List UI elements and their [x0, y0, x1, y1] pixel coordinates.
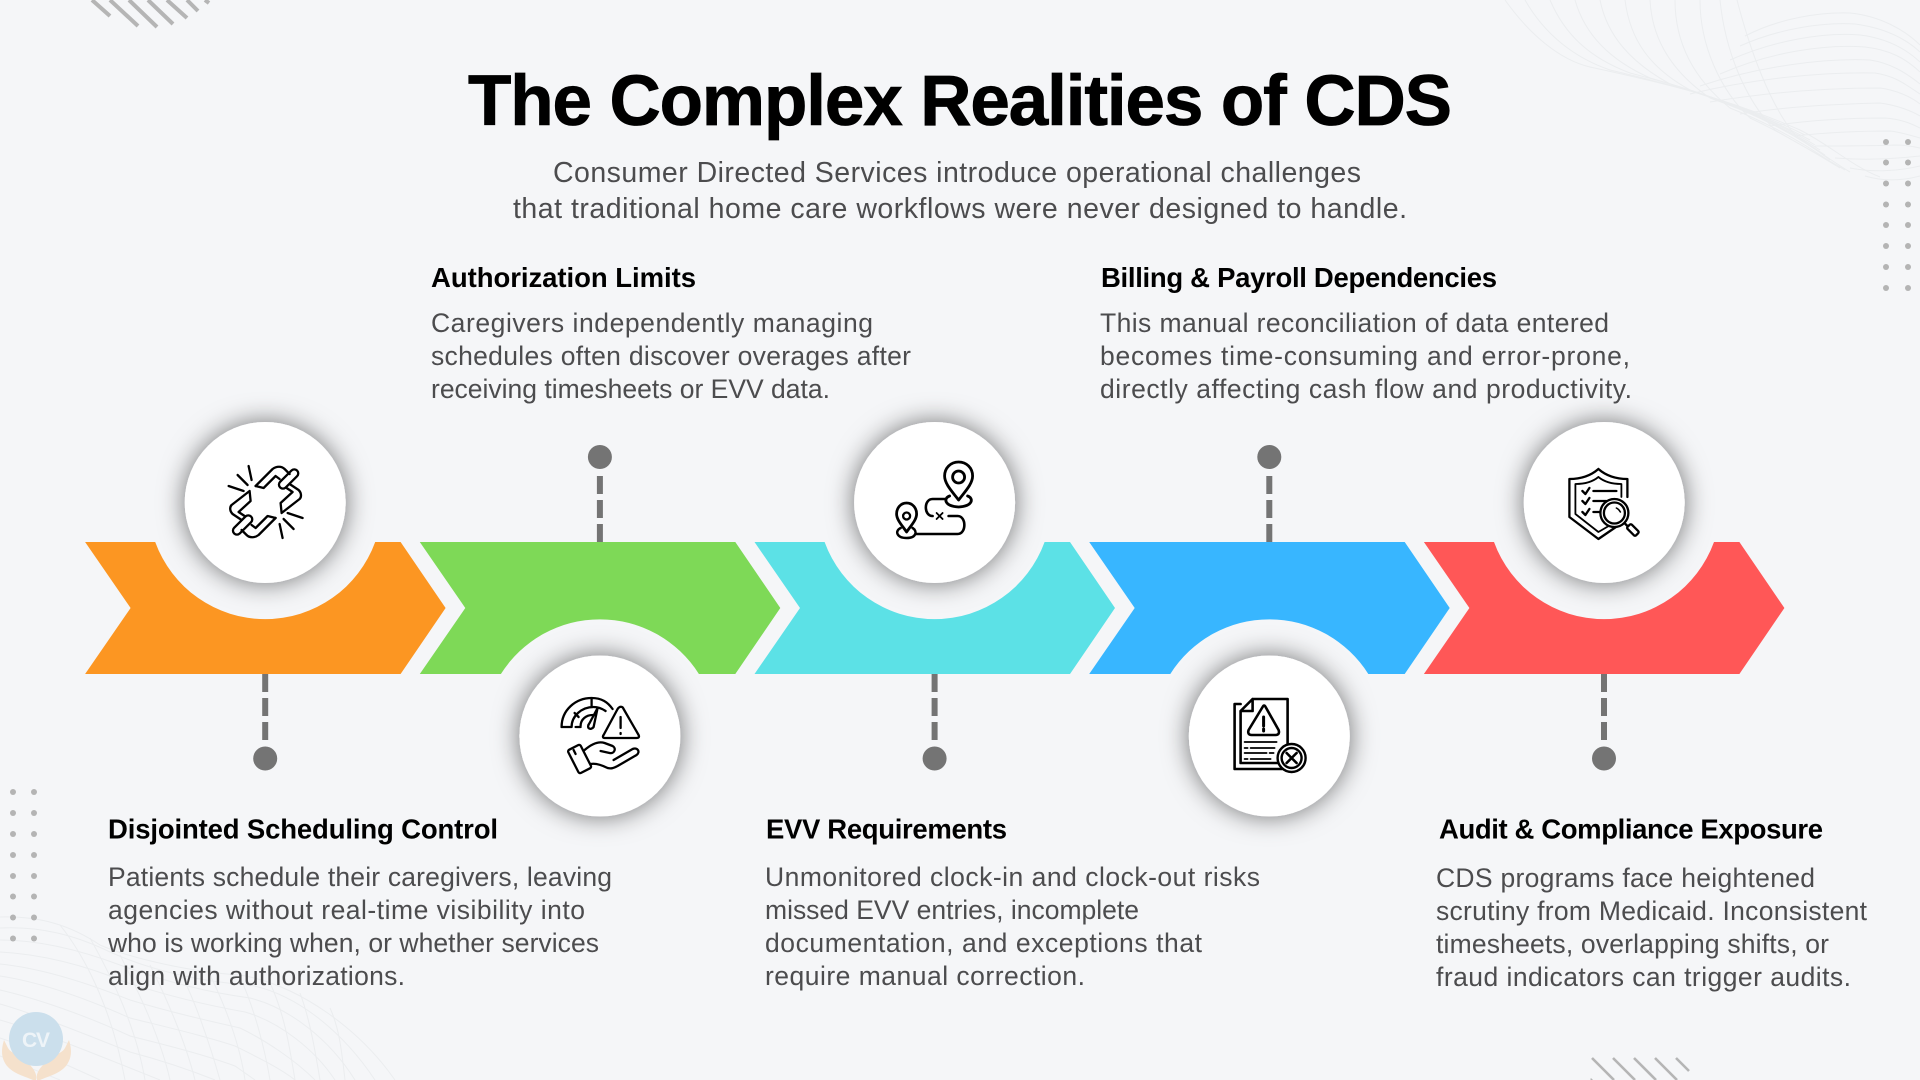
text block: Disjointed Scheduling Control: align with authorizations. [108, 961, 405, 991]
text block: EVV Requirements: Unmonitored clock-in and clock-out risks [765, 862, 1260, 892]
text block: Authorization Limits: receiving timesheets or EVV data. [431, 374, 830, 404]
text block: Audit and Compliance Exposure [1436, 814, 1868, 992]
text block: Authorization Limits: schedules often discover overages after [431, 341, 911, 371]
text block: Disjointed Scheduling Control: Disjointed Scheduling Control [108, 814, 498, 844]
text block: Audit and Compliance Exposure: CDS programs face heightened [1436, 863, 1815, 893]
connector: step 4 [1257, 445, 1281, 542]
text block: EVV Requirements: documentation, and exceptions that [765, 928, 1203, 958]
connector: step 5 [1592, 674, 1616, 770]
decoration: top-right dot grid [1883, 139, 1911, 291]
logo: CV in cupped hands [2, 1012, 71, 1080]
connector: step 3 [923, 674, 947, 770]
arrow: red step 5 [1424, 542, 1784, 674]
text block: EVV Requirements: require manual correction. [765, 961, 1085, 991]
decoration: top-right wave [1505, 0, 1920, 180]
icon badge: gauge, warning and hand [519, 656, 680, 816]
icon badge: route with map pins [854, 422, 1015, 583]
text block: Disjointed Scheduling Control [107, 814, 612, 991]
text block: Audit and Compliance Exposure: scrutiny from Medicaid. Inconsistent [1436, 896, 1868, 926]
text block: Billing and Payroll Dependencies: directly affecting cash flow and productivity. [1100, 374, 1632, 404]
text block: Audit and Compliance Exposure: timesheets, overlapping shifts, or [1436, 929, 1829, 959]
text block: Authorization Limits: Authorization Limits [431, 262, 696, 293]
icon badge: broken chain [185, 422, 346, 583]
arrow: orange step 1 [85, 542, 446, 674]
text block: Authorization Limits: Caregivers independently managing [431, 308, 873, 338]
subtitle [513, 157, 1407, 225]
text block: Billing and Payroll Dependencies: This manual reconciliation of data entered [1100, 308, 1609, 338]
subtitle: that traditional home care workflows were never designed to handle. [513, 193, 1407, 225]
connector: step 2 [588, 445, 612, 542]
decoration: bottom-left wave [0, 917, 395, 1080]
decoration: top-left hatch [92, 0, 209, 27]
arrow: green step 2 [420, 542, 780, 674]
text block: Authorization Limits [431, 262, 911, 404]
text block: EVV Requirements: missed EVV entries, incomplete [765, 895, 1139, 925]
text block: Billing and Payroll Dependencies: Billing & Payroll Dependencies [1101, 262, 1497, 293]
decoration: bottom-left dot grid [10, 789, 37, 942]
text block: Billing and Payroll Dependencies [1100, 262, 1632, 404]
logo: CV in cupped hands: CV [22, 1029, 50, 1052]
text block: Billing and Payroll Dependencies: becomes time-consuming and error-prone, [1100, 341, 1630, 371]
subtitle: Consumer Directed Services introduce operational challenges [553, 157, 1361, 189]
text block: EVV Requirements [765, 814, 1260, 991]
text block: Disjointed Scheduling Control: Patients schedule their caregivers, leaving [108, 862, 612, 892]
text block: Disjointed Scheduling Control: agencies without real-time visibility into [108, 895, 585, 925]
text block: Audit and Compliance Exposure: fraud indicators can trigger audits. [1436, 962, 1851, 992]
arrow: cyan step 3 [754, 542, 1115, 674]
text block: Disjointed Scheduling Control: who is working when, or whether services [107, 928, 599, 958]
arrow chain [85, 542, 1784, 674]
icon badge: shield checklist with magnifier [1524, 422, 1685, 583]
text block: Audit and Compliance Exposure: Audit & Compliance Exposure [1439, 814, 1823, 844]
arrow: blue step 4 [1089, 542, 1450, 674]
decoration: bottom-right hatch [1591, 1058, 1689, 1080]
text block: EVV Requirements: EVV Requirements [766, 814, 1007, 844]
connector: step 1 [253, 674, 277, 770]
title: The Complex Realities of CDS [468, 62, 1452, 141]
icon badge: document warning [1189, 656, 1350, 816]
